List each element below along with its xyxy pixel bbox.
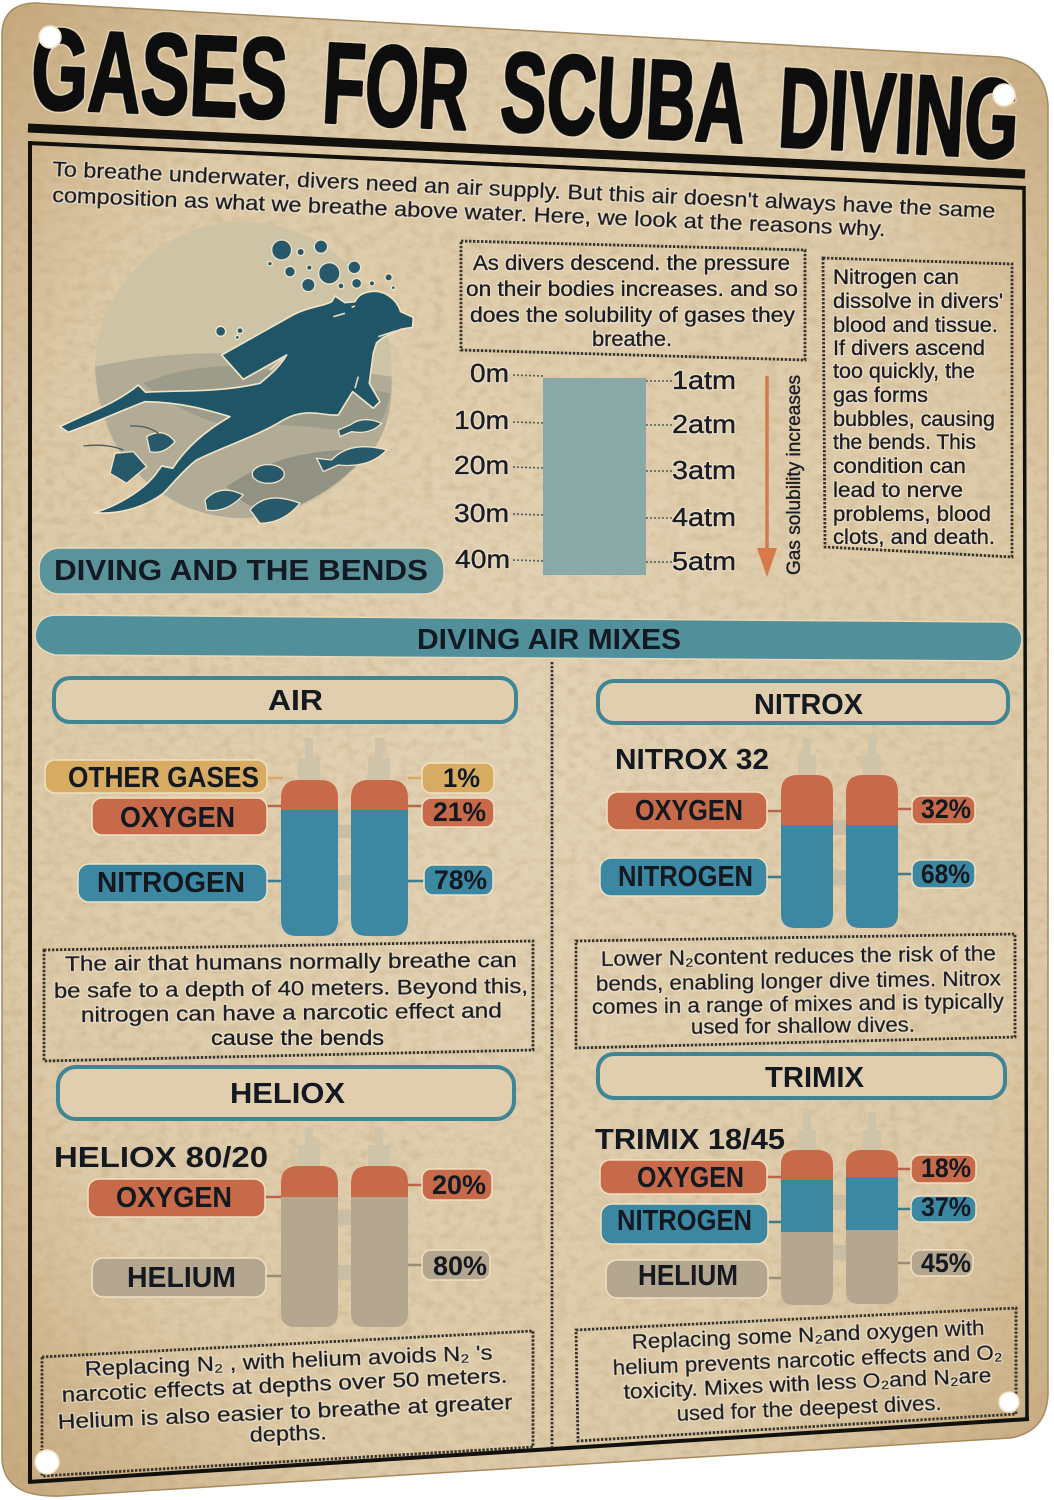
callout: pressure and solubility — [461, 241, 805, 360]
callout: pressure and solubility: breathe. — [592, 328, 672, 351]
water column — [543, 378, 646, 575]
section title: heliox: HELIOX — [230, 1078, 346, 1110]
diagram: trimix tanks — [767, 1112, 911, 1305]
panel: nitrox — [576, 681, 1015, 1048]
callout: nitrogen and the bends: If divers ascend — [833, 337, 985, 360]
label: nitrogen: NITROGEN — [618, 861, 753, 893]
title: SCUBA — [498, 29, 749, 167]
title: FOR — [320, 20, 472, 155]
section title: nitrox — [598, 681, 1008, 723]
section banner: Diving air mixes: DIVING AIR MIXES — [417, 624, 681, 656]
description: trimix: Replacing some N₂and oxygen with — [631, 1317, 985, 1354]
depth and pressure chart: 4atm — [672, 502, 736, 532]
diver silhouette — [60, 291, 413, 513]
value: 37%: 37% — [921, 1192, 971, 1222]
pill heading: Diving and the bends — [39, 548, 444, 594]
panel: heliox — [42, 1067, 533, 1476]
label: oxygen: OXYGEN — [637, 1162, 744, 1194]
title — [29, 6, 1022, 183]
diagram: nitrox tanks — [767, 738, 912, 928]
callout: nitrogen and the bends: dissolve in divers' — [833, 290, 1003, 313]
label: other gases: OTHER GASES — [68, 762, 259, 794]
callout: nitrogen and the bends: lead to nerve — [833, 479, 963, 502]
title: GASES — [29, 6, 290, 144]
description: trimix — [576, 1308, 1016, 1441]
value: 78%: 78% — [434, 865, 487, 895]
pill heading: Diving and the bends: DIVING AND THE BENDS — [54, 555, 428, 587]
callout: nitrogen and the bends: gas forms — [833, 384, 928, 407]
subheading: trimix 18/45: TRIMIX 18/45 — [595, 1124, 785, 1156]
callout: nitrogen and the bends: Nitrogen can — [833, 266, 959, 289]
callout: nitrogen and the bends: problems, blood — [833, 503, 991, 526]
depth and pressure chart — [454, 358, 805, 577]
section banner: Diving air mixes — [35, 615, 1022, 661]
value: 20%: 20% — [432, 1170, 486, 1200]
diagram: heliox tanks — [265, 1127, 422, 1327]
description: trimix: helium prevents narcotic effects and O₂ — [612, 1341, 1003, 1380]
value: 21%: 21% — [433, 797, 486, 827]
value: 18%: 18% — [921, 1153, 971, 1183]
callout: nitrogen and the bends — [823, 258, 1012, 557]
label: helium: HELIUM — [638, 1260, 738, 1292]
callout: nitrogen and the bends: too quickly, the — [833, 360, 975, 383]
value: 32%: 32% — [921, 794, 971, 824]
label: oxygen: OXYGEN — [120, 802, 235, 834]
section title: trimix — [598, 1054, 1005, 1098]
section title: air: AIR — [268, 685, 323, 717]
description: heliox: depths. — [249, 1421, 327, 1447]
depth and pressure chart: 20m — [454, 450, 509, 480]
fish — [110, 420, 387, 523]
description: trimix: used for the deepest dives. — [676, 1392, 942, 1426]
description: air: nitrogen can have a narcotic effect and — [81, 1000, 502, 1027]
intro text: composition as what we breathe above water. Here, we look at the reasons why. — [52, 184, 886, 241]
bubbles — [216, 240, 395, 339]
description: nitrox: comes in a range of mixes and is typically — [592, 990, 1005, 1019]
description: air: be safe to a depth of 40 meters. Beyond this, — [54, 975, 528, 1003]
description: heliox: Helium is also easier to breathe at greater — [57, 1391, 513, 1434]
label: nitrogen: NITROGEN — [617, 1205, 752, 1237]
callout: nitrogen and the bends: condition can — [833, 455, 966, 478]
depth and pressure chart: Gas solubility increases — [784, 375, 805, 575]
intro text — [52, 158, 996, 241]
description: nitrox: Lower N₂content reduces the risk of the — [601, 942, 996, 971]
value: 80%: 80% — [433, 1251, 487, 1281]
section title: heliox — [58, 1067, 514, 1119]
description: air — [44, 941, 533, 1061]
depth and pressure chart: 0m — [470, 358, 509, 388]
label: oxygen — [92, 798, 267, 835]
arrow: gas solubility increases — [757, 376, 777, 577]
label: oxygen — [600, 1160, 767, 1194]
diagram: air tanks — [267, 738, 424, 936]
illustration: diver with fish and bubbles — [60, 222, 413, 523]
intro text: To breathe underwater, divers need an air supply. But this air doesn't always have the same — [52, 158, 996, 223]
callout: pressure and solubility: does the solubility of gases they — [470, 304, 796, 327]
depth and pressure chart: 10m — [454, 405, 509, 435]
label: oxygen — [607, 792, 767, 830]
description: air: cause the bends — [211, 1027, 384, 1050]
description: trimix: toxicity. Mixes with less O₂and N₂are — [623, 1364, 992, 1404]
description: nitrox: used for shallow dives. — [691, 1014, 915, 1039]
label: oxygen: OXYGEN — [635, 795, 743, 827]
value: 45%: 45% — [921, 1248, 971, 1278]
centre divider — [551, 662, 553, 1448]
description: nitrox — [576, 934, 1015, 1048]
description: air: The air that humans normally breathe can — [65, 949, 517, 976]
callout: nitrogen and the bends: bubbles, causing — [833, 408, 995, 431]
subheading: nitrox 32: NITROX 32 — [615, 744, 769, 776]
description: heliox: narcotic effects at depths over 50 meters. — [61, 1365, 508, 1407]
depth and pressure chart: 1atm — [672, 365, 736, 395]
label: oxygen — [88, 1179, 265, 1217]
subheading: heliox 80/20: HELIOX 80/20 — [54, 1142, 268, 1174]
depth and pressure chart: 3atm — [672, 455, 736, 485]
callout: nitrogen and the bends: clots, and death. — [833, 526, 995, 549]
label: nitrogen — [78, 864, 267, 902]
fish antennae — [83, 426, 158, 450]
background circle with seabed bands — [95, 222, 392, 518]
description: heliox: Replacing N₂ , with helium avoids N₂ 's — [84, 1342, 493, 1381]
callout: pressure and solubility: on their bodies increases. and so — [466, 278, 798, 301]
callout: pressure and solubility: As divers descend. the pressure — [473, 252, 790, 275]
section title: air — [54, 678, 516, 722]
depth and pressure chart: 30m — [454, 498, 509, 528]
value: 68%: 68% — [921, 859, 970, 889]
panel: air — [44, 678, 533, 1061]
label: helium — [92, 1258, 266, 1297]
callout: nitrogen and the bends: blood and tissue. — [833, 314, 998, 337]
label: nitrogen: NITROGEN — [97, 867, 245, 899]
description: nitrox: bends, enabling longer dive times. Nitrox — [596, 967, 1002, 996]
description: heliox — [42, 1331, 533, 1476]
label: oxygen: OXYGEN — [116, 1182, 232, 1214]
value: 1%: 1% — [443, 763, 480, 793]
label: helium — [606, 1260, 768, 1298]
depth and pressure chart: 5atm — [672, 546, 736, 576]
depth and pressure chart: 40m — [455, 544, 510, 574]
section title: nitrox: NITROX — [754, 689, 864, 721]
value: 1% — [422, 763, 494, 793]
label: helium: HELIUM — [127, 1262, 236, 1294]
callout: nitrogen and the bends: the bends. This — [833, 431, 976, 454]
section title: trimix: TRIMIX — [765, 1062, 865, 1094]
panel: trimix — [576, 1054, 1016, 1441]
depth and pressure chart: 2atm — [672, 409, 736, 439]
diver gear highlights — [270, 306, 397, 388]
